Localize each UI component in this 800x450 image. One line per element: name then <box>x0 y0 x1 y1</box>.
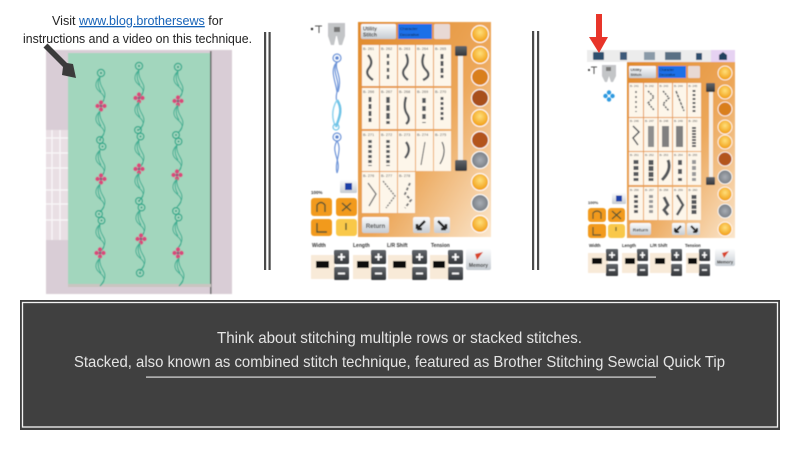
stitch selection grid: B- 250 <box>688 119 698 123</box>
controls: width length shift tension: Width <box>312 243 326 249</box>
stitch selection grid: B- 244 <box>674 84 683 88</box>
stitch selection grid: B- 273 <box>399 133 410 137</box>
edit buttons <box>311 198 357 236</box>
icon: stitch tab <box>688 66 700 78</box>
panel: sewing screen two <box>587 50 735 276</box>
icon: presser foot <box>328 23 345 45</box>
stitch selection grid: B- 241 <box>630 84 639 88</box>
stitch selection grid: B- 267 <box>381 90 392 94</box>
stitch selection grid: B- 243 <box>660 84 669 88</box>
stitch selection grid: B- 242 <box>645 84 654 88</box>
controls: width length shift tension: Width <box>589 243 601 248</box>
stitch selection grid: B- 252 <box>645 153 654 157</box>
stitch selection grid: B- 274 <box>417 133 428 137</box>
arrow buttons <box>413 217 450 233</box>
controls: width length shift tension: Length <box>622 243 636 248</box>
stitch selection grid: B- 266 <box>363 90 374 94</box>
icon: presser foot <box>602 65 616 82</box>
controls: width length shift tension: Tension <box>431 243 450 249</box>
stitch column 3 <box>171 63 184 286</box>
callout text: Stacked, also known as combined stitch technique, featured as Brother Stitching Sewcial Quick Tip <box>74 354 725 371</box>
return button <box>630 223 651 235</box>
stitch selection grid: B- 275 <box>435 133 446 137</box>
tab: utility stitch: Stitch <box>363 32 377 38</box>
zoom label and square button: 100% <box>311 190 323 195</box>
stitch selection grid: B- 258 <box>660 188 669 192</box>
stitch column 2 <box>133 62 147 277</box>
stitch selection grid <box>629 83 701 220</box>
zoom label and square button <box>588 193 626 205</box>
icon: needle symbol <box>311 26 322 33</box>
controls: width length shift tension: L/R Shift <box>650 243 668 248</box>
tab: utility stitch: Utility <box>630 67 642 72</box>
zoom label and square button: 100% <box>588 200 599 205</box>
stitch selection grid: B- 269 <box>417 90 428 94</box>
stitch selection grid: B- 270 <box>435 90 446 94</box>
stitch selection grid: B- 256 <box>630 188 639 192</box>
memory button: Memory <box>469 263 488 269</box>
tab: utility stitch: Stitch <box>630 72 642 77</box>
stitch selection grid: B- 276 <box>363 174 374 178</box>
controls: width length shift tension: L/R Shift <box>387 243 408 249</box>
side round buttons <box>472 26 488 232</box>
tab: utility stitch <box>629 66 656 78</box>
stitch selection grid: B- 249 <box>674 119 683 123</box>
stitch selection grid: B- 277 <box>381 174 392 178</box>
edit buttons <box>588 208 625 238</box>
zoom label and square button <box>311 180 357 195</box>
memory button <box>466 249 491 270</box>
icon: needle symbol <box>588 67 597 74</box>
icon: blue stitch flower <box>603 90 615 102</box>
stitch selection grid: B- 259 <box>674 188 683 192</box>
tab: character decorative stitch <box>398 24 432 39</box>
stitch column 1 <box>94 69 107 286</box>
stitch selection grid: B- 251 <box>630 153 639 157</box>
stitch selection grid: B- 255 <box>688 153 698 157</box>
divider: right double line <box>532 31 539 270</box>
icon: stitch tab <box>434 24 450 39</box>
tab: utility stitch <box>361 24 396 39</box>
heading: visit blog instructions: Visit www.blog.brothersews for <box>52 13 224 28</box>
stitch selection grid: B- 264 <box>417 47 428 51</box>
controls: width length shift tension: Tension <box>685 243 701 248</box>
orange stitch panel <box>358 22 491 237</box>
divider: left double line <box>264 32 271 270</box>
scrollbar <box>706 83 715 185</box>
top tab bar <box>587 50 735 62</box>
arrow buttons <box>672 223 700 235</box>
stitch selection grid: B- 271 <box>363 133 374 137</box>
stitch selection grid: B- 272 <box>381 133 392 137</box>
memory button: Memory <box>717 260 734 264</box>
tab: character decorative stitch: Character <box>660 68 675 72</box>
stitch selection grid: B- 248 <box>660 119 669 123</box>
heading: visit blog instructions <box>23 13 252 46</box>
photo: stitched green fabric sample <box>46 50 232 294</box>
return button: Return <box>366 224 385 230</box>
memory button <box>715 249 735 266</box>
heading: visit blog instructions: instructions and a video on this technique. <box>23 31 252 46</box>
stitch selection grid: B- 247 <box>645 119 654 123</box>
stitch selection grid <box>362 45 451 213</box>
side round buttons <box>718 66 732 236</box>
panel: dark quick tip callout <box>20 300 780 430</box>
stitch selection grid: B- 260 <box>688 188 698 192</box>
panel: sewing screen one <box>311 22 491 280</box>
stitch selection grid: B- 257 <box>645 188 654 192</box>
controls: width length shift tension: Length <box>353 243 370 249</box>
stitch selection grid: B- 245 <box>688 84 698 88</box>
stitch selection grid: B- 261 <box>363 47 374 51</box>
stitch selection grid: B- 254 <box>674 153 683 157</box>
return button: Return <box>633 228 648 234</box>
controls: width length shift tension <box>588 243 710 276</box>
tab: character decorative stitch: Character <box>400 26 418 31</box>
stitch selection grid: B- 262 <box>381 47 392 51</box>
stitch selection grid: B- 268 <box>399 90 410 94</box>
scrollbar <box>455 46 467 171</box>
stitch selection grid: B- 263 <box>399 47 410 51</box>
tab: utility stitch: Utility <box>363 26 377 32</box>
orange stitch panel <box>627 62 735 238</box>
stitch selection grid: B- 253 <box>660 153 669 157</box>
tab: character decorative stitch: Decorative <box>660 73 675 77</box>
tab: character decorative stitch: Decorative <box>400 32 420 37</box>
callout text: Think about stitching multiple rows or stacked stitches. <box>217 330 582 347</box>
stitch preview: blue column <box>333 54 341 173</box>
stitch selection grid: B- 278 <box>399 174 410 178</box>
arrow: red arrow pointing to camera tab <box>589 14 608 53</box>
callout text <box>74 330 725 371</box>
stitch selection grid: B- 246 <box>630 119 639 123</box>
tab: character decorative stitch <box>658 66 686 78</box>
arrow: dark arrow pointing to fabric <box>44 44 76 78</box>
return button <box>362 217 389 233</box>
stitch selection grid: B- 265 <box>435 47 446 51</box>
controls: width length shift tension <box>311 243 463 280</box>
